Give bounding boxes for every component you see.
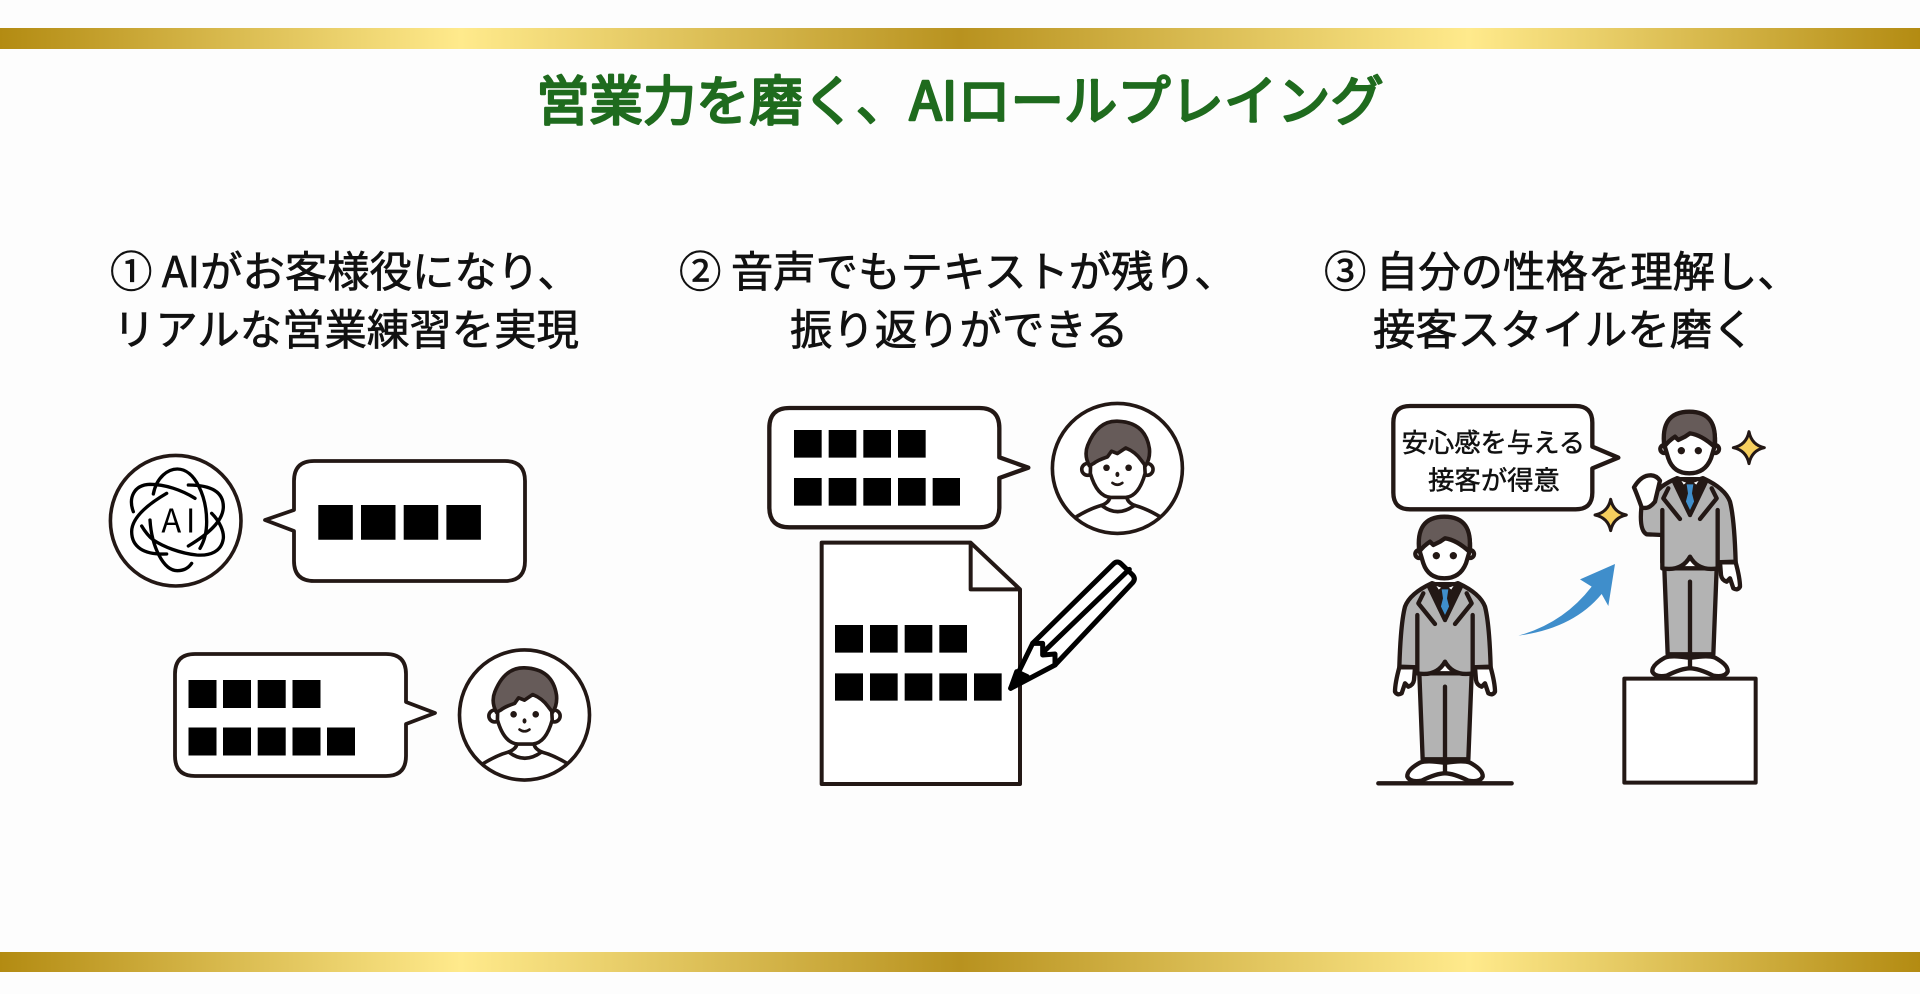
heading: step 1: ① AIがお客様役になり、 xyxy=(110,239,580,300)
icon: AI atom: AI xyxy=(161,496,195,543)
speech bubble: customer xyxy=(175,654,435,776)
man on podium xyxy=(1634,412,1740,676)
icon: AI atom xyxy=(110,455,241,586)
illustration: transcript xyxy=(769,408,1134,784)
title: 営業力を磨く、AIロールプレイング xyxy=(536,59,1384,136)
speech bubble: AI xyxy=(265,461,525,581)
document xyxy=(822,543,1020,784)
icon: customer avatar xyxy=(459,650,590,780)
speech bubble xyxy=(769,408,1028,527)
speech bubble: strength xyxy=(1393,406,1618,509)
panel: step 1 xyxy=(110,239,590,780)
heading: step 3: ③ 自分の性格を理解し、 xyxy=(1324,239,1800,300)
illustration: AI and customer chat xyxy=(110,455,525,776)
sparkle right xyxy=(1733,432,1764,464)
heading: step 2: 振り返りができる xyxy=(790,297,1128,358)
speech bubble: strength: 接客が得意 xyxy=(1428,458,1560,497)
panel: step 2 xyxy=(679,239,1237,784)
heading: step 2: ② 音声でもテキストが残り、 xyxy=(679,239,1237,300)
icon: customer avatar xyxy=(1052,403,1182,533)
top gold band xyxy=(0,28,1920,49)
arrow xyxy=(1518,564,1615,636)
sparkle left xyxy=(1595,499,1626,531)
heading: step 1: リアルな営業練習を実現 xyxy=(113,297,579,358)
podium xyxy=(1624,679,1756,783)
speech bubble: strength: 安心感を与える xyxy=(1402,421,1585,460)
icon: pencil xyxy=(1011,562,1134,688)
illustration: style growth xyxy=(1378,406,1764,783)
man on ground xyxy=(1378,517,1512,783)
panel: step 3 xyxy=(1324,239,1800,783)
heading: step 3: 接客スタイルを磨く xyxy=(1373,297,1755,358)
bottom gold band xyxy=(0,952,1920,972)
